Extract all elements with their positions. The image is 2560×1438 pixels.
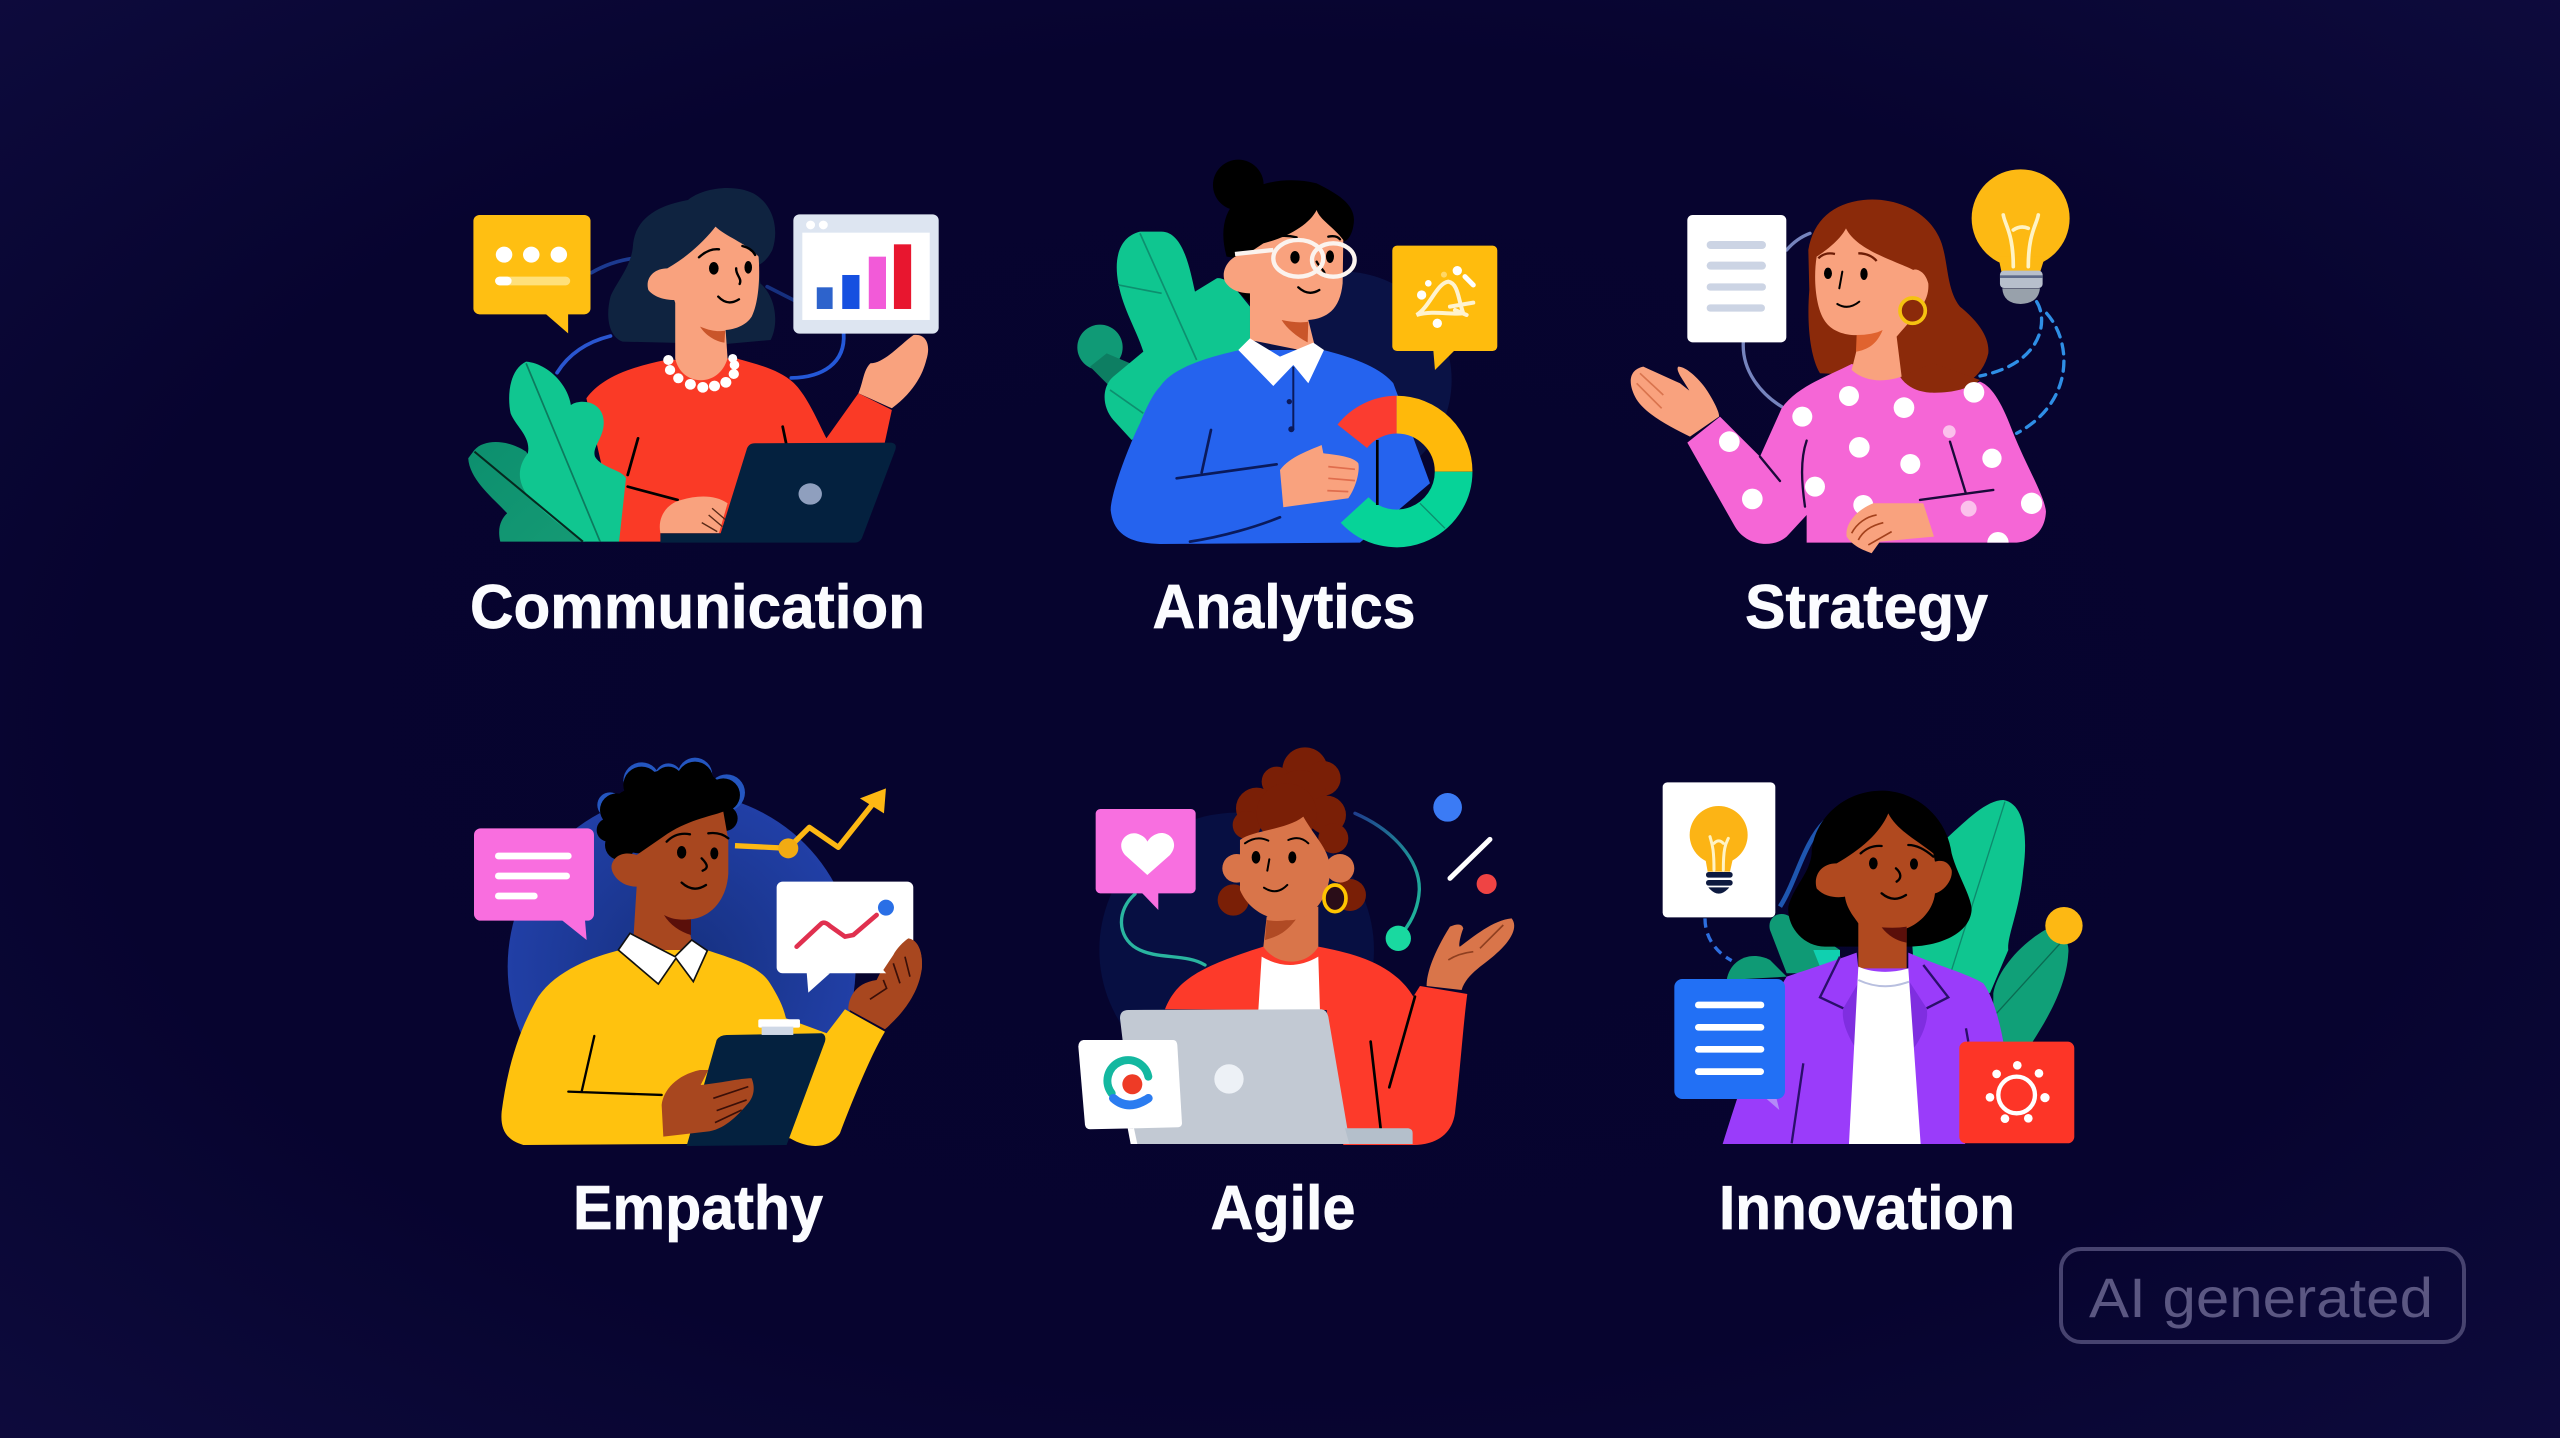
left raised hand [1631,367,1719,437]
yellow dot [2045,907,2083,944]
hair [608,188,775,344]
illustration: woman in purple blazer [1663,782,2083,1144]
right hand [1846,503,1934,553]
bar chart window [793,214,939,334]
pink sweater [1687,364,2046,544]
raised hand [858,335,928,408]
panel: analytics [1077,160,1497,642]
hand [1280,445,1359,507]
raised hand [848,938,922,1029]
badge: AI generated: AI generated [2089,1266,2433,1329]
illustration: woman with donut chart [1077,160,1497,544]
badge: AI generated [2061,1249,2464,1342]
label: Agile: Agile [1210,1174,1356,1243]
face [1816,813,1952,973]
pink bubble [474,828,594,940]
red sweater [586,358,892,542]
fingers in front of bubble [883,938,922,993]
speech bubble [473,215,591,333]
hand [660,497,728,533]
donut chart [1352,415,1454,528]
neck and face [675,297,728,380]
red sun card [1959,1042,2074,1143]
label: Analytics: Analytics [1152,573,1416,642]
illustration: woman with polka-dot top [1631,169,2070,553]
purple blazer [1723,953,2003,1144]
growth arrow [735,788,886,858]
clipboard [687,1019,825,1146]
panel: empathy [474,758,922,1243]
glasses [1235,240,1355,277]
panel: innovation [1663,782,2083,1243]
label: Empathy: Empathy [573,1174,823,1243]
blue document bubble [1674,979,1785,1110]
raised hand [1427,918,1514,990]
red jacket [1165,947,1467,1145]
floating dots and dash [1386,793,1497,951]
white shirt [1849,967,1921,1144]
face [1224,210,1343,353]
yellow sweater [501,950,885,1146]
laptop [660,443,896,543]
panel: agile [1078,747,1514,1243]
plant [468,442,585,542]
hair [1808,199,1988,393]
illustration: woman with silver laptop [1078,747,1514,1145]
hair bun [1218,747,1366,916]
hair [1788,791,1972,947]
blue sweater [1111,350,1430,544]
face [1222,817,1354,920]
hair [1213,160,1264,210]
label: Strategy: Strategy [1745,573,1989,642]
plants [1727,800,2068,1043]
light bulb [1972,169,2070,304]
collar [1238,338,1324,386]
label: Innovation: Innovation [1719,1174,2015,1243]
illustration: woman with laptop [468,188,939,543]
panel: strategy [1631,169,2070,642]
face [1815,228,1928,380]
neck [1263,907,1318,966]
logo card [1078,1040,1182,1129]
alert bubble [1392,246,1497,370]
curly hair [597,758,745,818]
necklace [663,354,739,393]
collar [618,933,707,984]
panel: communication [468,188,939,642]
polka dots [1719,382,2042,543]
hand on clipboard [662,1070,754,1137]
document [1687,215,1786,342]
plant [1077,325,1123,370]
face [611,812,728,961]
label: Communication: Communication [470,573,925,642]
light bulb card [1663,782,1775,917]
heart bubble [1096,809,1196,910]
illustration: man with clipboard [474,758,922,1146]
line chart bubble [777,882,913,993]
laptop [1120,1009,1413,1144]
